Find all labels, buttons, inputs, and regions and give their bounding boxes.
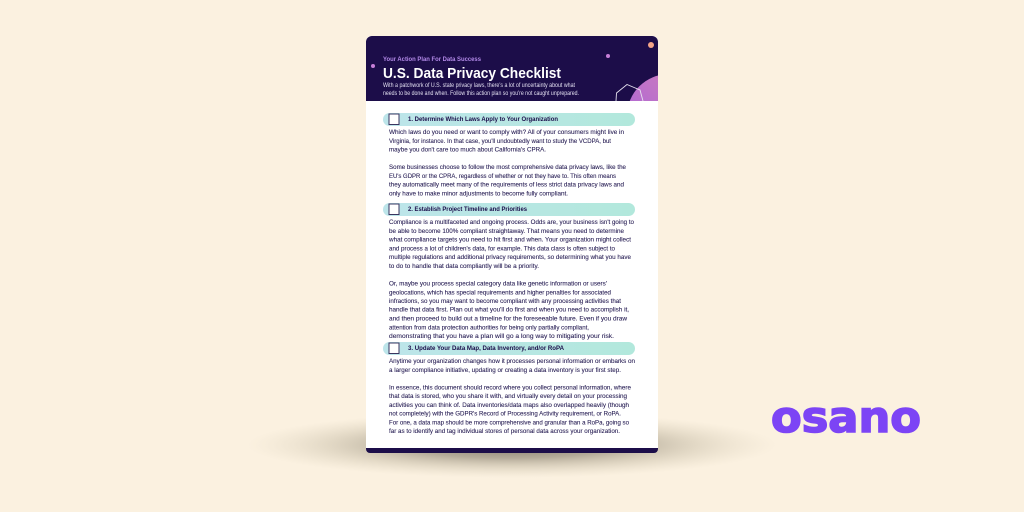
section 3 heading bar — [383, 342, 635, 355]
section 2 body text: multiple regulations and additional privacy requirements, so determining what you have — [389, 254, 631, 261]
section 2 body text: geolocations, which has special requirements and higher penalties for associated — [389, 289, 611, 296]
icon: orange dot — [648, 42, 654, 48]
section 1 body text: maybe you don't care too much about California's CPRA. — [389, 147, 546, 154]
section 1 body text: Some businesses choose to follow the most comprehensive data privacy laws, like the — [389, 164, 626, 171]
card shadow — [247, 412, 777, 478]
section 3 body text: a larger compliance initiative, updating or creating a data inventory is your first step. — [389, 367, 621, 374]
logo: osano: osano — [771, 393, 921, 443]
icon: hexagon outline — [616, 84, 643, 101]
title: U.S. Data Privacy Checklist — [383, 65, 561, 82]
section 1 body text: EU's GDPR or the CPRA, regardless of whether or not they have to. This often means — [389, 173, 617, 180]
footer band — [366, 448, 658, 453]
header kicker: Your Action Plan For Data Success — [383, 56, 481, 63]
section 2 body text: and process a lot of children's data, for example. This data class is often subject to — [389, 245, 615, 252]
section 1 body text: Which laws do you need or want to comply with? All of your consumers might live in — [389, 129, 624, 136]
section 2 body text: attention from data protection authorities for being only partially compliant, — [389, 324, 589, 331]
icon: checkbox 2 — [389, 204, 399, 214]
section 2 body text: infractions, so you may want to become compliant with any processing activities that — [389, 298, 621, 305]
document card — [366, 36, 658, 453]
section 1 body text — [389, 129, 626, 198]
header intro text: With a patchwork of U.S. state privacy laws, there's a lot of uncertainty about what — [383, 83, 575, 89]
section 2 body text: to do to handle that data compliantly will be a priority. — [389, 263, 539, 270]
section 2 body text: what compliance targets you need to hit first and when. Your organization might collect — [388, 236, 631, 244]
section 3 body text: far as to identify and tag individual stores of personal data across your organization. — [389, 428, 620, 435]
section 2 body text: handle that data first. Plan out what you'll do first and when you need to accomplish it, — [389, 307, 629, 314]
section 3 body text: In essence, this document should record where you collect personal information, where — [389, 384, 631, 391]
section 1 heading: 1. Determine Which Laws Apply to Your Organization — [408, 116, 558, 123]
section 2 body text: Compliance is a multifaceted and ongoing process. Odds are, your business isn't going to — [389, 219, 634, 226]
header intro text: needs to be done and when. Follow this action plan so you're not caught unprepared. — [383, 91, 579, 97]
section 3 body text: Anytime your organization changes how it processes personal information or embarks on — [389, 358, 635, 365]
card body — [366, 36, 658, 453]
section 1 body text: Virginia, for instance. In that case, you'll undoubtedly want to study the VCDPA, but — [389, 138, 611, 145]
section 3 body text: For one, a data map should be more comprehensive and granular than a RoPa, going so — [389, 419, 629, 426]
panel: header band — [366, 36, 658, 101]
section 2 body text: Or, maybe you process special category data like genetic information or users' — [389, 280, 607, 288]
header intro text — [383, 83, 579, 97]
section 1 heading bar — [383, 113, 635, 126]
section 2 heading: 2. Establish Project Timeline and Priorities — [408, 206, 528, 213]
section 1 body text: they automatically meet many of the requirements of less strict data privacy laws and — [389, 182, 624, 189]
section 2 body text — [388, 219, 634, 340]
section 1 body text: only have to make minor adjustments to become fully compliant. — [389, 191, 568, 198]
section 2 heading bar — [383, 203, 635, 216]
section 3 body text: that data is stored, who you share it with, and virtually every detail on your processing — [389, 393, 627, 400]
section 2 body text: and then proceed to build out a timeline for the foreseeable future. Even if you draw — [389, 316, 627, 322]
section 3 body text: activities you can think of. Data inventories/data maps also overlapped heavily (though — [389, 402, 629, 409]
icon: gradient orb — [630, 76, 658, 101]
section 3 heading: 3. Update Your Data Map, Data Inventory, and/or RoPA — [408, 345, 565, 352]
section 2 body text: be able to become 100% compliant straightaway. That means you need to determine — [389, 228, 624, 235]
icon: checkbox 3 — [389, 343, 399, 354]
icon: pink dot right — [606, 54, 610, 58]
section 2 body text: demonstrating that you have a plan will go a long way to mitigating your risk. — [389, 333, 614, 340]
section 3 body text — [389, 358, 635, 435]
section 3 body text: not completely) with the GDPR's Record of Processing Activity requirement, or RoPA. — [389, 411, 621, 418]
icon: pink dot left — [371, 64, 375, 68]
icon: checkbox 1 — [389, 114, 399, 124]
